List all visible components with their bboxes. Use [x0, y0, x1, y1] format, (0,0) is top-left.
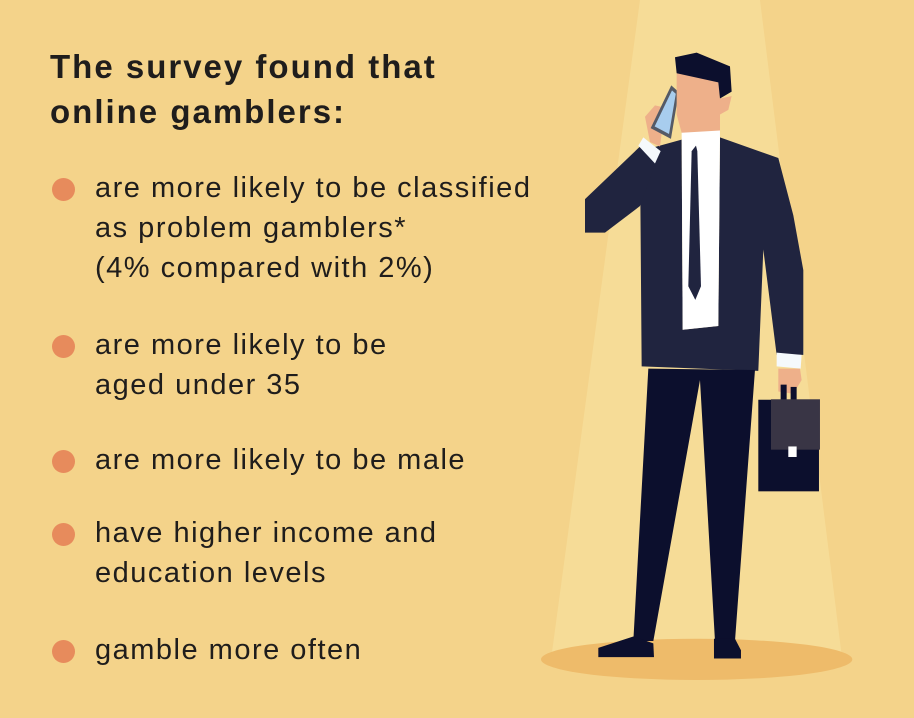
bullet 5 text: gamble more often	[95, 634, 362, 666]
bullet 1 text	[95, 172, 531, 284]
bullet 4 text: education levels	[95, 557, 327, 589]
bullet 2 text: aged under 35	[95, 369, 302, 401]
bullet 4 icon	[52, 523, 75, 546]
bullet 4 text	[95, 517, 438, 589]
bullet 1 icon	[52, 178, 75, 201]
bullet 1 text: are more likely to be classified	[95, 172, 531, 204]
bullet 1 text: as problem gamblers*	[95, 212, 407, 244]
briefcase	[758, 385, 820, 491]
bullet 5 icon	[52, 640, 75, 663]
spotlight	[552, 0, 842, 655]
bullet 2 icon	[52, 335, 75, 358]
bullet 2 text	[95, 329, 388, 401]
bullet 3 text: are more likely to be male	[95, 444, 466, 476]
title: The survey found that	[50, 48, 437, 85]
bullet 4 text: have higher income and	[95, 517, 438, 549]
bullet 2 text: are more likely to be	[95, 329, 388, 361]
title	[50, 48, 437, 130]
floor shadow	[541, 639, 852, 680]
title: online gamblers:	[50, 93, 346, 130]
man figure	[585, 53, 803, 658]
bullet 1 text: (4% compared with 2%)	[95, 252, 434, 284]
bullet 3 icon	[52, 450, 75, 473]
